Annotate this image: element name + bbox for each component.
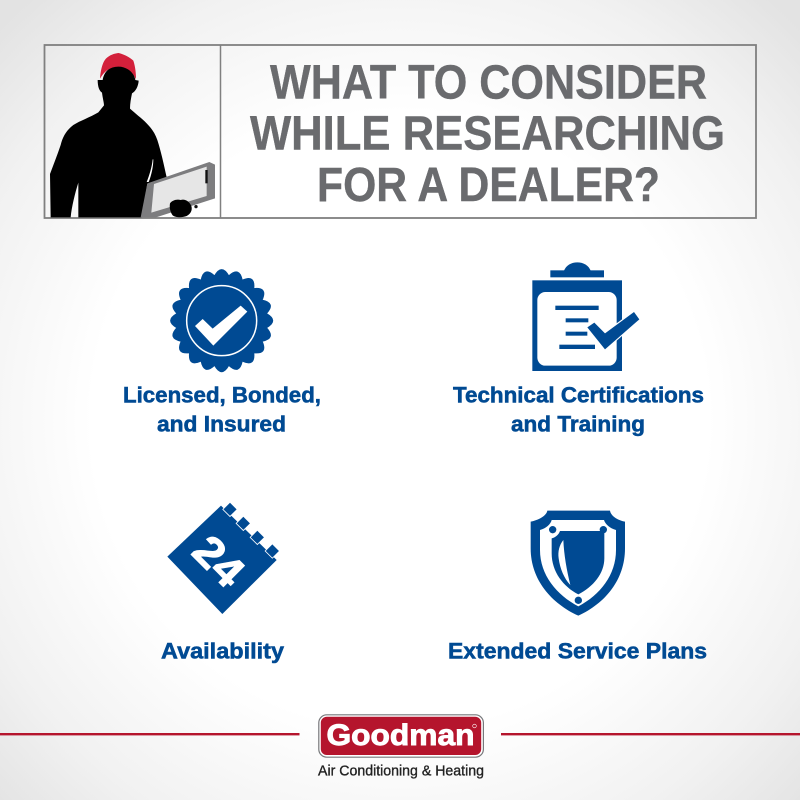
- label: licensed, bonded, and insured: [123, 383, 321, 437]
- icon: shield: [531, 511, 625, 616]
- label: licensed, bonded, and insured: Licensed, Bonded,: [123, 383, 321, 408]
- label: availability: Availability: [161, 639, 285, 664]
- logo: Goodman: Air Conditioning & Heating: [318, 762, 484, 780]
- footer rule: left: [0, 733, 300, 735]
- icon: scalloped badge with check mark: [171, 270, 273, 372]
- icon: clipboard with check mark: [532, 262, 639, 371]
- label: technical certifications and training: [453, 383, 704, 437]
- logo: Goodman: [318, 715, 484, 780]
- title: [250, 56, 725, 212]
- footer rule: right: [501, 733, 800, 735]
- header panel: [44, 45, 756, 218]
- label: technical certifications and training: Technical Certifications: [453, 383, 704, 408]
- label: extended service plans: Extended Service Plans: [448, 639, 707, 664]
- title: WHILE RESEARCHING: [250, 108, 725, 160]
- label: licensed, bonded, and insured: and Insured: [157, 412, 286, 437]
- icon: 24 hour calendar: [167, 503, 279, 614]
- title: FOR A DEALER?: [317, 159, 660, 212]
- label: technical certifications and training: and Training: [511, 412, 645, 437]
- logo: Goodman: Goodman: [326, 719, 474, 752]
- icon: technician silhouette with clipboard: [50, 53, 215, 217]
- title: WHAT TO CONSIDER: [270, 56, 707, 109]
- icon: 24 hour calendar: 24: [183, 526, 253, 597]
